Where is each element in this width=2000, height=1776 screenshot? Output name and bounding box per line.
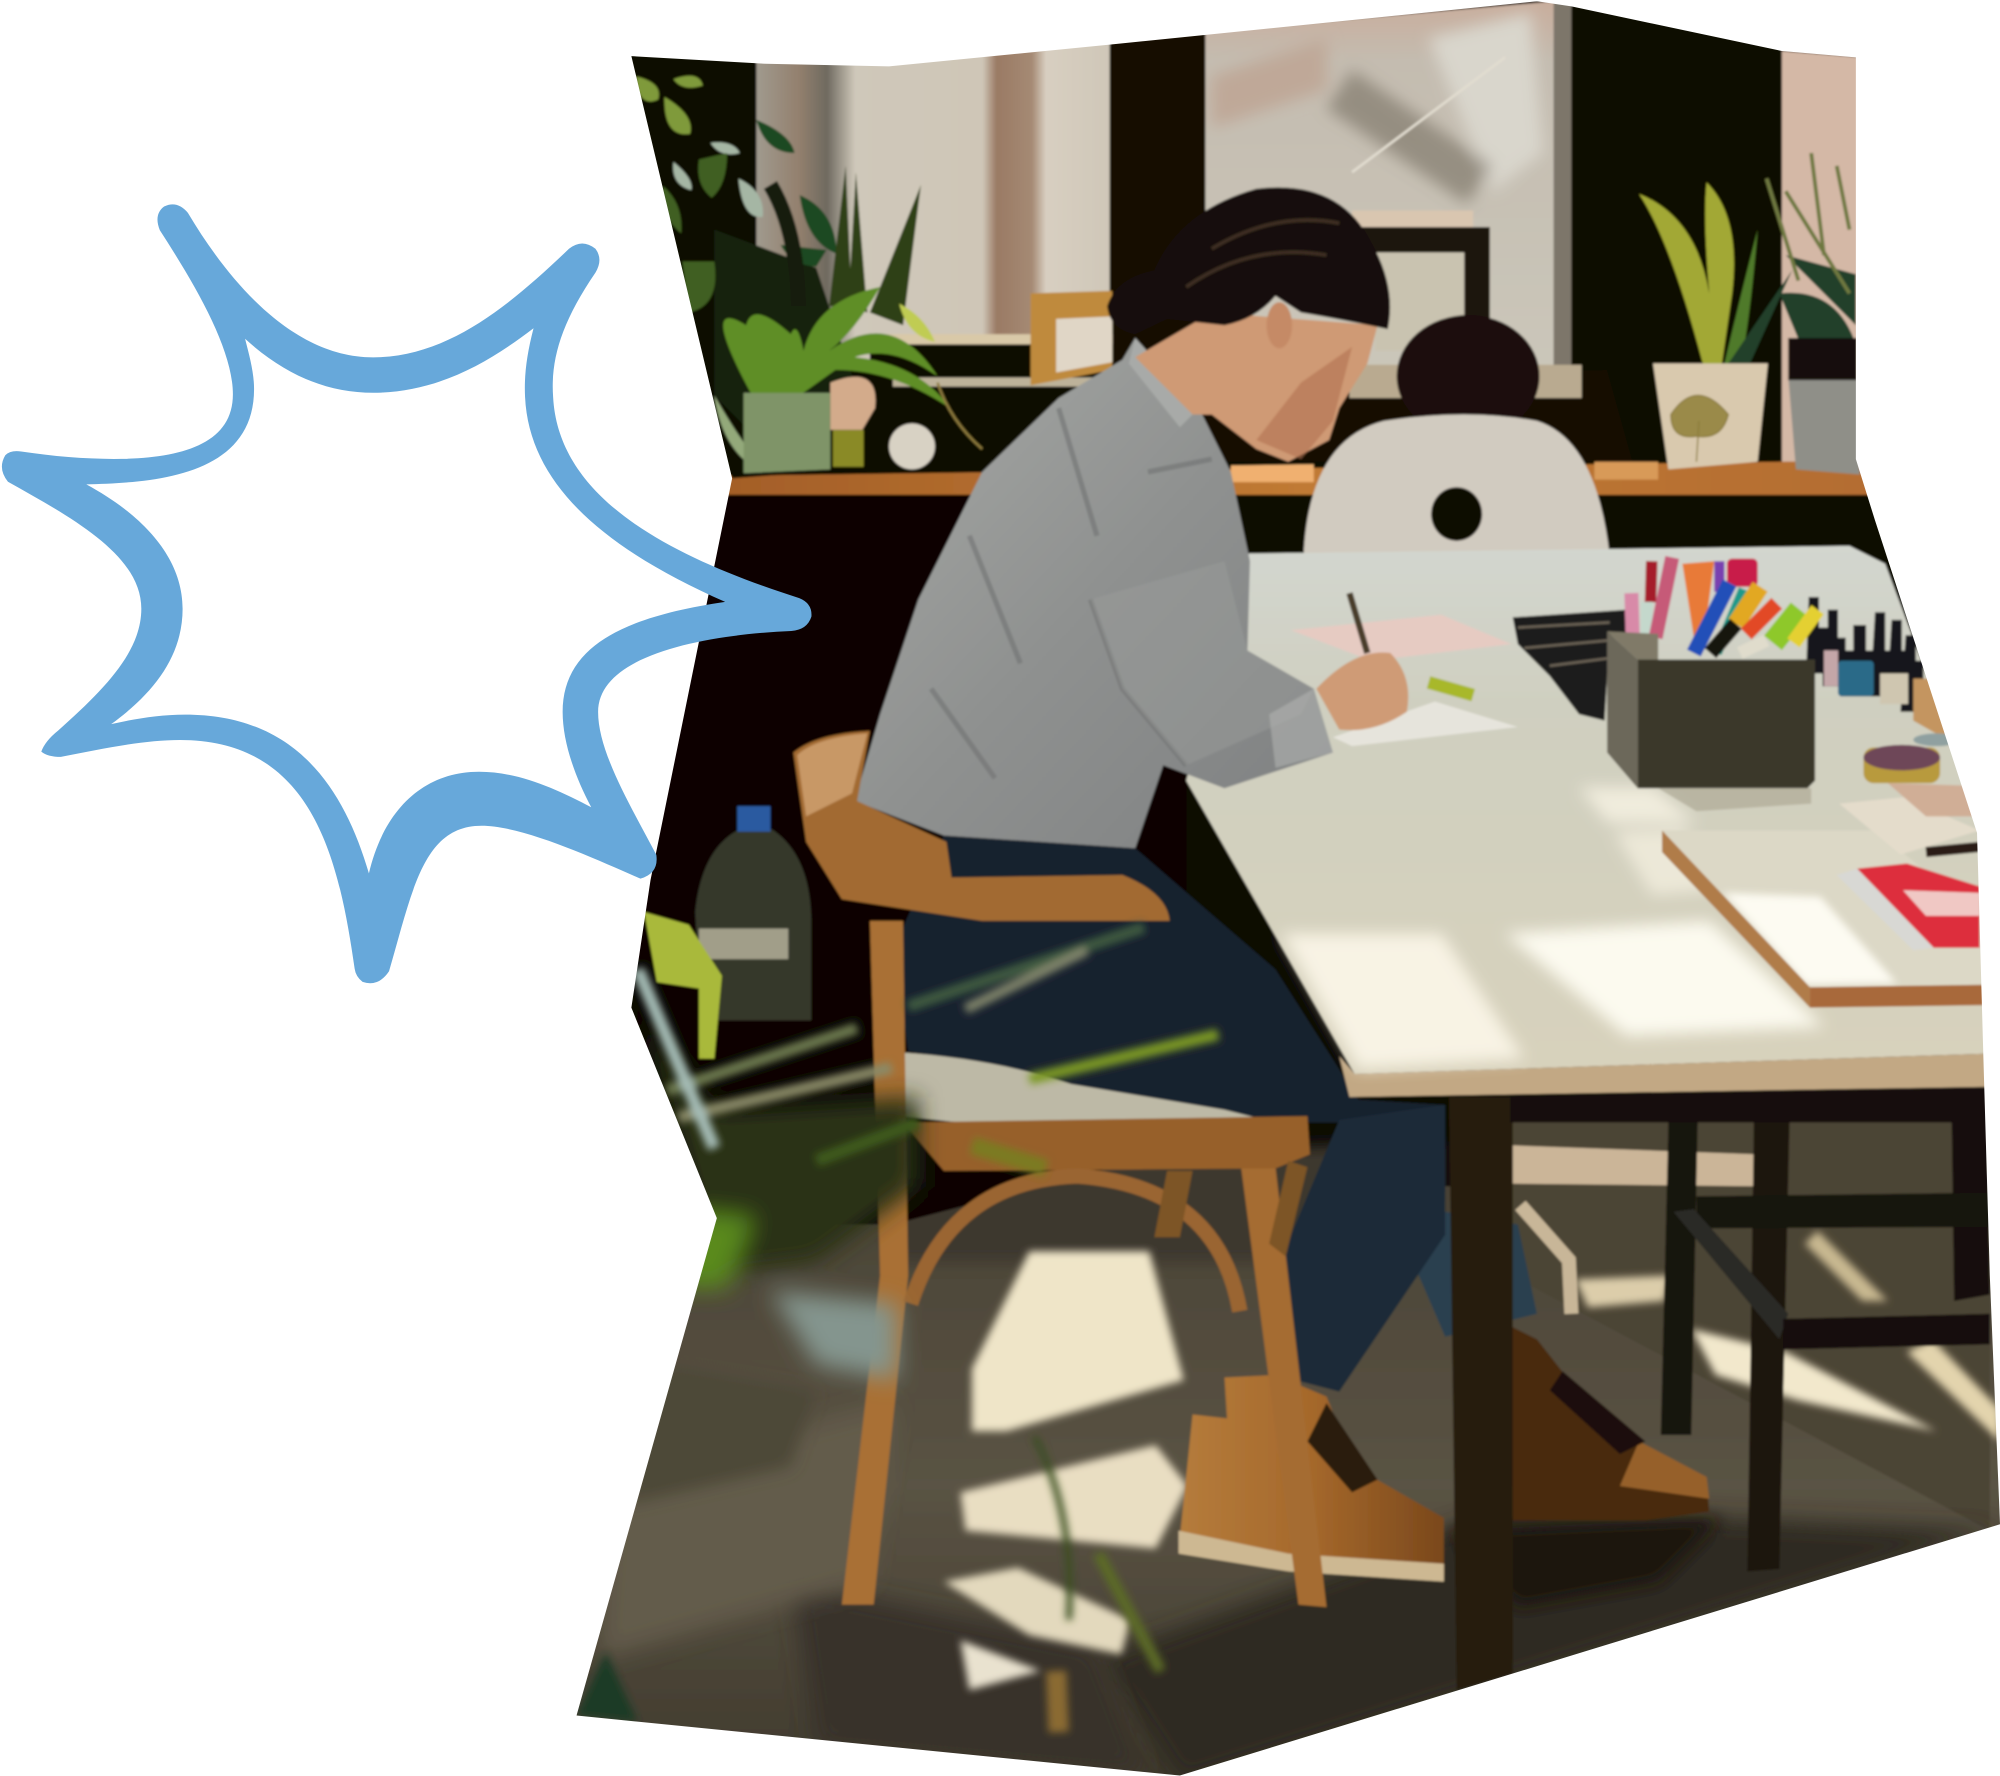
- drawing board with papers: [1662, 783, 1985, 1008]
- photo: artist drawing at a studio table: [561, 0, 2000, 1776]
- marker holder box: [1607, 631, 1815, 811]
- floor: [561, 1186, 2000, 1776]
- picture frames on the sill: [1031, 210, 1490, 385]
- boots: [1179, 1327, 1709, 1582]
- dark room background: [631, 1, 1984, 1188]
- trousers: far lower leg: [1413, 1212, 1537, 1337]
- floor shading: [599, 1097, 2000, 1776]
- ink bottles: [1806, 597, 1923, 712]
- seat cushion: [903, 1050, 1254, 1124]
- blue starburst outline: [2, 204, 811, 983]
- foreground blurred plant: [577, 927, 1218, 1732]
- table legs and frame: [1449, 1087, 1990, 1690]
- sun patches on floor: [944, 1231, 2000, 1690]
- potted plants right: [1639, 153, 1860, 474]
- dark back area at floor level: [638, 495, 1186, 1224]
- floor-level bottle and watering can: [644, 806, 811, 1059]
- hand and pen: [1316, 593, 1408, 730]
- windows: [756, 0, 1862, 466]
- white chair back opposite: [1304, 315, 1610, 556]
- wood block and tins: [1864, 679, 1959, 783]
- table edge: [1339, 1054, 1990, 1097]
- table top: [1186, 546, 1990, 1074]
- trousers: near lower leg: [1276, 1105, 1445, 1392]
- trousers: thigh: [893, 835, 1443, 1122]
- potted plants left: [631, 56, 982, 478]
- shirt: [855, 338, 1333, 848]
- wooden shelf: [727, 460, 1875, 495]
- head and hair: [1107, 187, 1390, 462]
- wooden chair: [793, 731, 1327, 1607]
- drawing paper: [1291, 615, 1518, 746]
- markers in holder: [1631, 557, 1818, 653]
- sunlight on table: [1282, 787, 1824, 1069]
- pen roll on table: [1513, 610, 1633, 721]
